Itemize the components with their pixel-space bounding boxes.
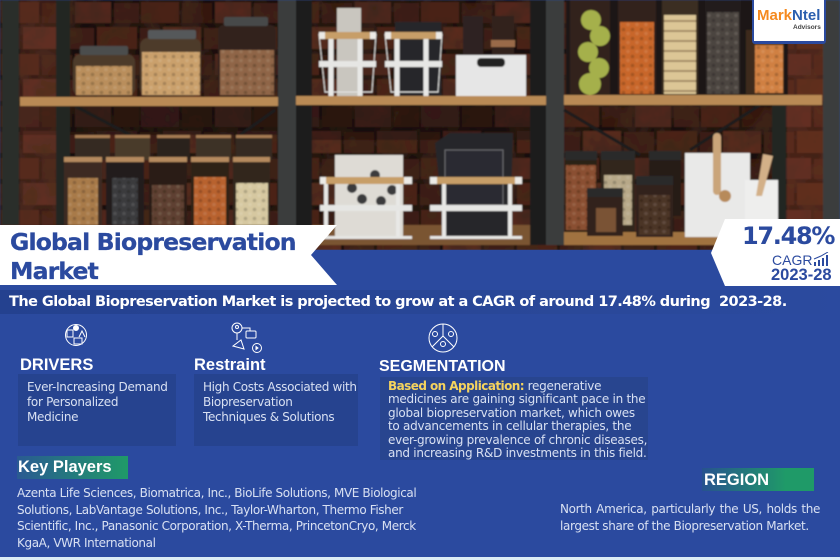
- drivers heading: DRIVERS: [20, 356, 93, 374]
- key players text: KgaA, VWR International: [17, 536, 156, 550]
- key players heading: [17, 456, 128, 479]
- logo wordmark: MarkNtel: [757, 7, 820, 24]
- panel: drivers: [18, 324, 176, 446]
- CAGR value: 17.48%: [742, 222, 834, 250]
- drivers text: [27, 380, 168, 424]
- drivers text: Ever-Increasing Demand: [27, 380, 168, 394]
- key players text: Scientific, Inc., Panasonic Corporation, X-Therma, PrincetonCryo, Merck: [17, 519, 416, 533]
- segmentation text: global biopreservation market, which owes: [388, 406, 635, 420]
- restraint text: Biopreservation: [203, 395, 292, 409]
- summary text: The Global Biopreservation Market is projected to grow at a CAGR of around 17.48% during 2023-28.: [9, 294, 787, 310]
- segmentation text: to advancements in cellular therapies, the: [388, 419, 631, 433]
- CAGR badge: [711, 219, 840, 286]
- title text: [10, 228, 296, 285]
- segmentation text: ever-growing prevalence of chronic diseases,: [388, 433, 647, 447]
- lower right jars: [565, 151, 597, 231]
- baskets top: [337, 8, 361, 96]
- baskets bottom: [335, 155, 403, 238]
- logo tagline: Advisors: [793, 24, 821, 31]
- icon: growth bars: [814, 252, 828, 266]
- segmentation heading: SEGMENTATION: [379, 358, 506, 375]
- region text: North America, particularly the US, holds the largest share of the Biopreservation Market.: [560, 502, 820, 532]
- uprights: [2, 0, 19, 225]
- segmentation text: [388, 379, 647, 460]
- panel: segmentation: [379, 324, 648, 460]
- region heading: REGION: [704, 471, 769, 489]
- top right jars: [566, 0, 788, 95]
- drivers text box: [18, 374, 176, 446]
- region heading: [702, 468, 814, 491]
- panel: key players: [17, 456, 416, 550]
- logo: MarkNtel Advisors: [752, 0, 826, 44]
- title text: Global Biopreservation: [10, 228, 296, 256]
- icon: drivers globe: [65, 324, 87, 346]
- segmentation text: and increasing R&D investments in this field.: [388, 446, 647, 460]
- key players text: Solutions, LabVantage Solutions, Inc., Taylor-Wharton, Thermo Fisher: [17, 502, 403, 516]
- restraint text: Techniques & Solutions: [203, 410, 334, 424]
- summary strip: [0, 290, 840, 314]
- white bags: [685, 153, 750, 237]
- drivers text: Medicine: [27, 410, 78, 424]
- icon: restraint network: [232, 322, 262, 353]
- key players text: Azenta Life Sciences, Biomatrica, Inc., BioLife Solutions, MVE Biological: [17, 486, 416, 500]
- restraint heading: Restraint: [194, 356, 266, 374]
- title text: Market: [10, 257, 98, 285]
- segmentation text: Based on Application: regenerative: [388, 379, 601, 393]
- drivers text: for Personalized: [27, 395, 118, 409]
- title banner: [0, 225, 337, 285]
- top left jars: [73, 54, 135, 96]
- CAGR period: 2023-28: [771, 266, 832, 284]
- panel: restraint: [194, 322, 358, 446]
- panel: region: [560, 468, 820, 532]
- lower left jars: [75, 136, 110, 160]
- photo: pantry shelves against a brick wall: [0, 0, 840, 250]
- bottom edge strip: [0, 557, 840, 560]
- segmentation text: medicines are gaining significant pace in the: [388, 392, 645, 406]
- key players text: [17, 486, 416, 550]
- CAGR label: CAGR: [772, 252, 812, 268]
- key players heading: Key Players: [18, 458, 112, 476]
- restraint text box: [194, 374, 358, 446]
- bottles and white bin: [463, 16, 483, 56]
- restraint text: [202, 380, 357, 424]
- segmentation text box: [380, 377, 648, 460]
- shelves: [20, 97, 278, 106]
- restraint text: High Costs Associated with: [203, 380, 357, 394]
- icon: segmentation circle: [428, 324, 458, 352]
- braces: [75, 105, 760, 155]
